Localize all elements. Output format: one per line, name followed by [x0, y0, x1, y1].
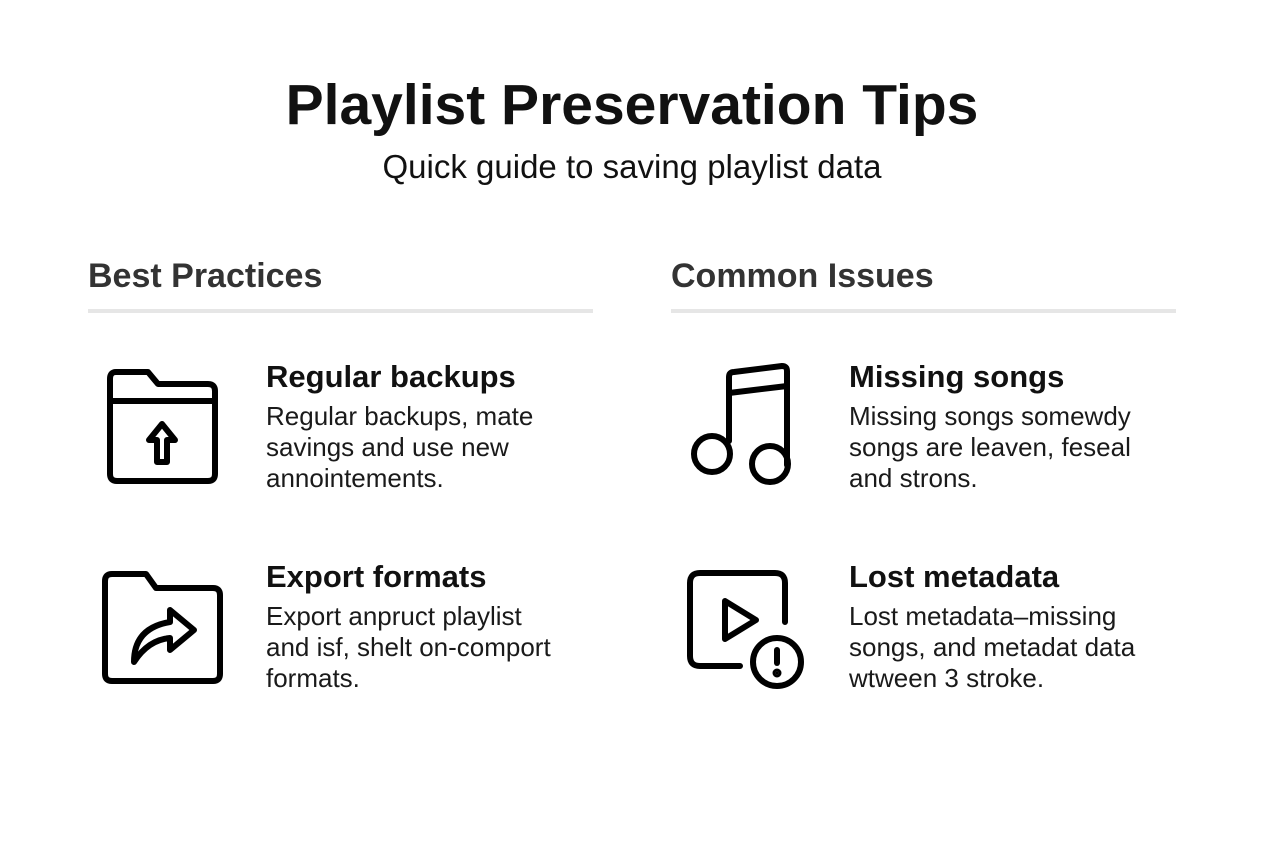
item: missing songs: Missing songs somewdy [849, 401, 1131, 431]
heading: common issues: Common Issues [671, 257, 934, 295]
item: regular backups: Regular backups [266, 359, 516, 394]
item: export formats: formats. [266, 663, 360, 693]
item: export formats: Export anpruct playlist [266, 601, 522, 631]
item: lost metadata: songs, and metadat data [849, 632, 1135, 662]
item: missing songs: Missing songs [849, 359, 1064, 394]
item: regular backups: savings and use new [266, 432, 509, 462]
heading: best practices: Best Practices [88, 257, 322, 295]
item: export formats [266, 559, 551, 693]
item: regular backups [266, 359, 533, 493]
icon: folder upload [107, 369, 218, 484]
item: missing songs: and strons. [849, 463, 978, 493]
item: regular backups: Regular backups, mate [266, 401, 533, 431]
item: export formats: Export formats [266, 559, 486, 594]
item: lost metadata: Lost metadata–missing [849, 601, 1116, 631]
item: missing songs: songs are leaven, feseal [849, 432, 1131, 462]
item: lost metadata: wtween 3 stroke. [849, 663, 1044, 693]
item: regular backups: annointements. [266, 463, 444, 493]
title: Playlist Preservation Tips [286, 73, 978, 137]
panel: common issues [671, 257, 1176, 693]
subtitle: Quick guide to saving playlist data [383, 148, 881, 185]
icon: folder export [102, 571, 223, 684]
icon: music note [691, 363, 791, 485]
item: lost metadata: Lost metadata [849, 559, 1059, 594]
item: export formats: and isf, shelt on-comport [266, 632, 551, 662]
panel: best practices [88, 257, 593, 693]
item: missing songs [849, 359, 1131, 493]
icon: video alert [687, 570, 804, 689]
item: lost metadata [849, 559, 1136, 693]
